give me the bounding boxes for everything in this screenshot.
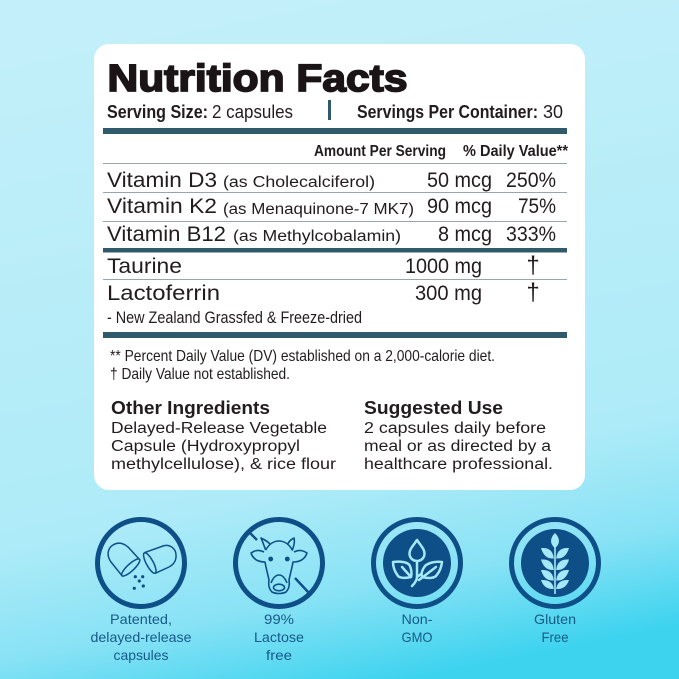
row: lactoferrin: Lactoferrin <box>107 282 220 305</box>
suggested use: meal or as directed by a <box>364 438 551 455</box>
label: non-GMO: Non- <box>402 611 433 627</box>
row: vitamin B12: Vitamin B12 <box>107 223 226 246</box>
serving size: Serving Size: <box>107 101 208 122</box>
row: lactoferrin: † <box>526 279 540 306</box>
row: vitamin D3 <box>107 169 556 192</box>
icon: no cow <box>236 520 322 606</box>
label: non-GMO: GMO <box>402 629 433 645</box>
suggested use: 2 capsules daily before <box>364 420 546 437</box>
panel: nutrition facts card <box>94 44 585 490</box>
title: Nutrition Facts <box>108 58 408 100</box>
table header: % Daily Value** <box>463 143 569 160</box>
other ingredients: Delayed-Release Vegetable <box>111 420 327 437</box>
row: taurine <box>107 252 540 279</box>
suggested use: Suggested Use <box>364 398 503 418</box>
row: vitamin D3: 250% <box>506 169 556 192</box>
other ingredients: Other Ingredients <box>111 398 270 418</box>
row: vitamin B12 <box>107 223 556 246</box>
servings per container: 30 <box>543 101 563 122</box>
suggested use <box>364 398 553 473</box>
label: gluten free: Free <box>542 629 569 645</box>
label: lactose free: free <box>266 647 292 663</box>
row: taurine: Taurine <box>107 255 182 278</box>
table header <box>314 143 569 160</box>
row: taurine: 1000 mg <box>405 255 482 278</box>
label: patented capsules: capsules <box>114 647 168 663</box>
row: vitamin D3: 50 mcg <box>427 169 492 192</box>
table header: Amount Per Serving <box>314 143 446 160</box>
row: lactoferrin: 300 mg <box>415 282 482 305</box>
suggested use: healthcare professional. <box>364 456 553 473</box>
icon: capsules <box>98 520 184 606</box>
label: patented capsules: delayed-release <box>90 629 192 645</box>
row: vitamin K2: 75% <box>518 195 556 218</box>
row: lactoferrin <box>107 279 540 306</box>
label: gluten free <box>534 611 576 645</box>
row: vitamin B12: 333% <box>506 223 556 246</box>
label: lactose free: Lactose <box>254 629 304 645</box>
footnotes <box>110 348 495 383</box>
lactoferrin note: - New Zealand Grassfed & Freeze-dried <box>107 308 362 327</box>
row: vitamin K2: (as Menaquinone-7 MK7) <box>223 201 414 218</box>
servings per container: Servings Per Container: <box>357 101 538 122</box>
row: vitamin K2 <box>107 195 556 218</box>
icon: non-GMO plant <box>374 520 460 606</box>
other ingredients: Capsule (Hydroxypropyl <box>111 438 300 455</box>
label: patented capsules: Patented, <box>110 611 172 627</box>
footnotes: ** Percent Daily Value (DV) established on a 2,000-calorie diet. <box>110 348 495 365</box>
other ingredients <box>111 398 336 473</box>
row: vitamin B12: 8 mcg <box>438 223 492 246</box>
label: gluten free: Gluten <box>534 611 576 627</box>
label: lactose free: 99% <box>264 611 294 627</box>
row: vitamin D3: Vitamin D3 <box>107 169 217 192</box>
row: vitamin K2: 90 mcg <box>427 195 492 218</box>
serving size: 2 capsules <box>212 101 293 122</box>
label: lactose free <box>254 611 304 663</box>
label: non-GMO <box>402 611 433 645</box>
label: patented capsules <box>90 611 192 663</box>
serving size <box>107 101 293 122</box>
other ingredients: methylcellulose), & rice flour <box>111 456 336 473</box>
row: vitamin D3: (as Cholecalciferol) <box>223 174 375 191</box>
row: vitamin B12: (as Methylcobalamin) <box>233 228 401 245</box>
row: taurine: † <box>526 252 540 279</box>
footnotes: † Daily Value not established. <box>110 366 290 383</box>
row: vitamin K2: Vitamin K2 <box>107 195 217 218</box>
icon: gluten free wheat <box>512 520 598 606</box>
